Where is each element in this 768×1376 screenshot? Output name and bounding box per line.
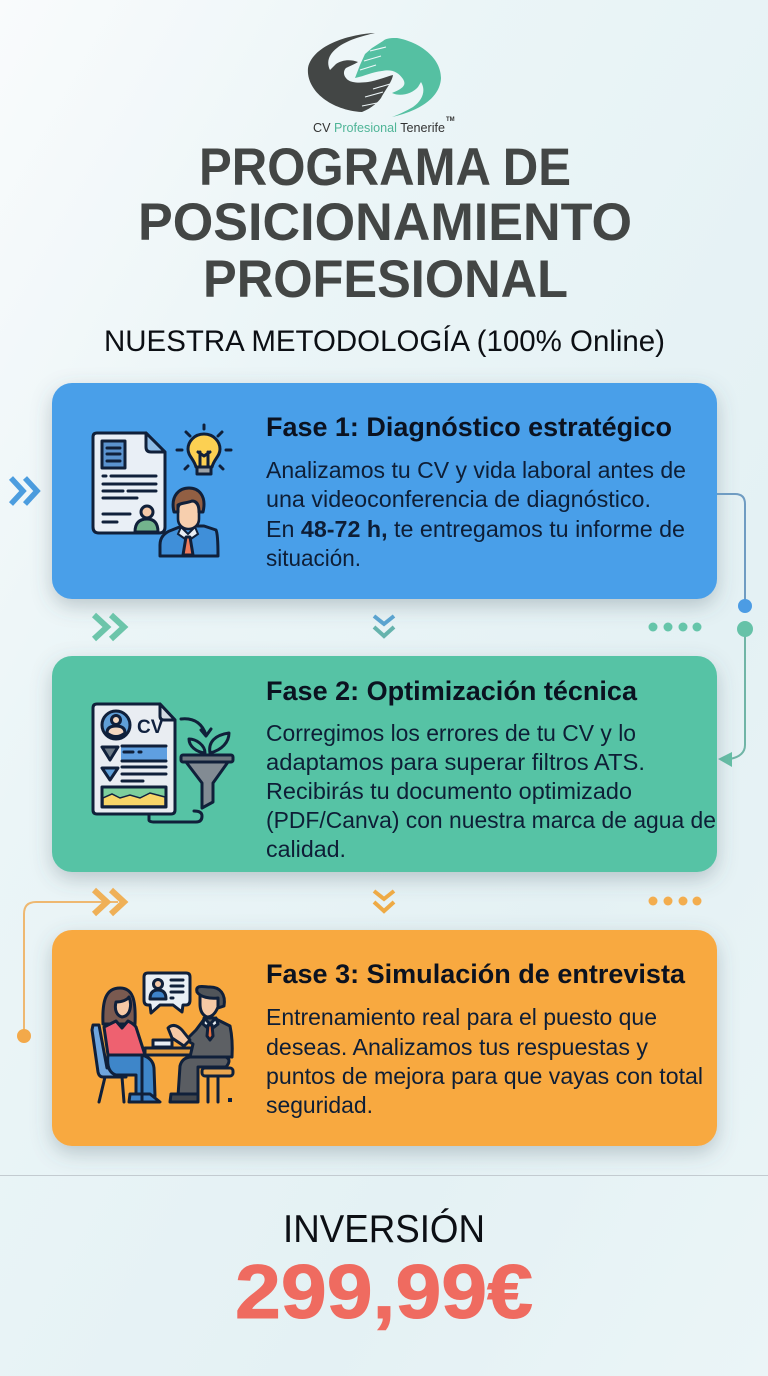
body text: En 48-72 h, te entregamos tu informe de [266,516,685,542]
icon: CV document, funnel and plant: CV [137,717,164,738]
logo: CV Profesional Tenerife [308,33,455,135]
body text: calidad. [266,836,346,862]
icon: document, lightbulb and person [93,425,231,556]
arrow: down chevrons 2 [374,891,394,911]
arrow: left blue chevrons [11,478,37,504]
body text: una videoconferencia de diagnóstico. [266,486,651,512]
title: POSICIONAMIENTO [138,193,632,252]
icon: dark hand [308,33,393,112]
heading: Fase 1: Diagnóstico estratégico [266,412,672,442]
heading: Fase 2: Optimización técnica [266,676,638,706]
arrow: blue connector [717,494,752,613]
body text [266,1004,703,1118]
body text: deseas. Analizamos tus respuestas y [266,1034,649,1060]
heading: Fase 3: Simulación de entrevista [266,959,686,989]
body text: Entrenamiento real para el puesto que [266,1004,657,1030]
title [138,138,632,309]
arrow: down chevrons 1 [374,616,394,636]
body text: seguridad. [266,1092,373,1118]
icon: interview at a table [92,973,233,1102]
dots: green [648,622,702,632]
arrow: green double chevron [94,615,124,639]
icon: CV document, funnel and plant [93,704,233,822]
body text: puntos de mejora para que vayas con total [266,1063,703,1089]
panel: fase 1 [52,383,717,599]
dots: orange [648,896,702,906]
body text: Corregimos los errores de tu CV y lo [266,720,636,746]
body text: adaptamos para superar filtros ATS. [266,749,645,775]
body text: (PDF/Canva) con nuestra marca de agua de [266,807,716,833]
title: PROGRAMA DE [199,138,571,197]
price: 299,99€ [235,1250,533,1335]
body text: Recibirás tu documento optimizado [266,778,632,804]
icon: green hand [355,38,441,117]
arrow: orange connector and chevrons [17,890,124,1043]
body text: Analizamos tu CV y vida laboral antes de [266,457,686,483]
logo wordmark: CV Profesional Tenerife [313,120,445,135]
arrow: green connector [718,621,753,767]
title: PROFESIONAL [203,250,568,309]
panel: fase 2 [52,656,717,872]
body text [266,720,716,862]
trademark: TM [446,117,455,123]
panel: fase 3 [52,930,717,1146]
subtitle: NUESTRA METODOLOGÍA (100% Online) [104,325,665,358]
body text [266,457,686,571]
body text: situación. [266,545,361,571]
investment label: INVERSIÓN [283,1208,485,1251]
